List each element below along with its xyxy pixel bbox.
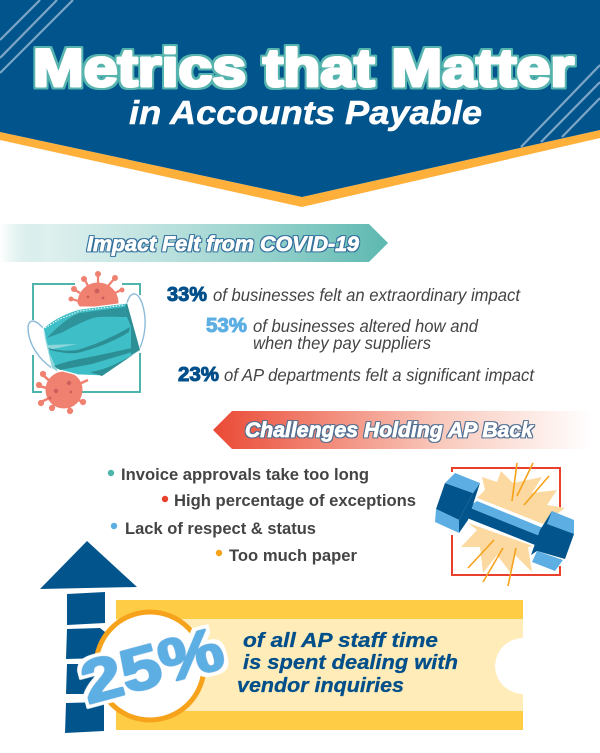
callout text: is spent dealing with [243,652,458,674]
icon: up arrow [40,541,137,733]
stat: 23%: of AP departments felt a significant impact [224,365,535,385]
stat: 33%: 33% [167,284,207,306]
callout text: vendor inquiries [237,675,404,697]
callout text: of all AP staff time [243,630,438,652]
title: Metrics that Matter [33,39,574,98]
stat: 23%: 23% [178,364,219,386]
stat: 53%: when they pay suppliers [253,333,431,353]
callout text [237,630,458,697]
stat: 53% [206,315,479,353]
stat: 53%: of businesses altered how and [253,316,479,336]
banner: Challenges Holding AP Back [213,411,592,449]
bullet: exceptions: High percentage of exceptions [174,491,416,510]
bullet: invoice approvals: Invoice approvals take too long [121,465,369,484]
ticket callout [96,600,523,730]
subtitle: in Accounts Payable [129,94,482,131]
big number 25%: 25% [74,615,230,717]
stat: 53%: 53% [206,315,247,337]
banner: Impact Felt from COVID-19 [0,224,388,262]
virus top [69,272,124,306]
stat: 33%: of businesses felt an extraordinary impact [213,285,521,305]
bullet: respect: Lack of respect & status [125,519,316,538]
virus bottom [36,371,88,414]
header banner [0,0,600,207]
ear loops [28,294,145,368]
icon: dumbbell [435,463,574,586]
bullet: paper: Too much paper [229,546,357,565]
mask body [43,303,140,376]
banner: Impact Felt from COVID-19: Impact Felt from COVID-19 [87,233,359,256]
icon: face mask with viruses [28,272,145,414]
banner: Challenges Holding AP Back: Challenges Holding AP Back [245,419,534,442]
